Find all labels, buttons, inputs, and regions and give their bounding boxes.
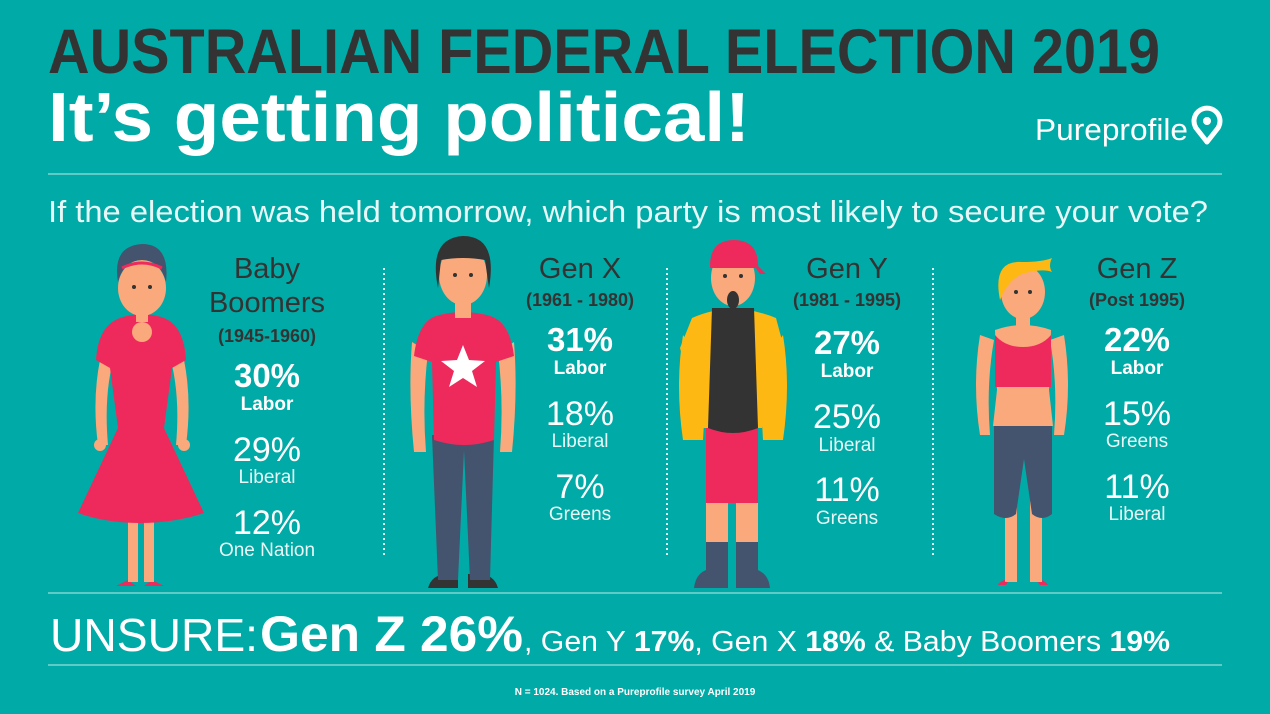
text: gen x: (1961 - 1980) [526, 290, 634, 310]
text: gen y: 25% [813, 398, 881, 436]
text: gen y: Greens [816, 508, 878, 529]
text: gen y: Liberal [818, 435, 876, 456]
unsure summary: , Gen Y 17%, Gen X 18% & Baby Boomers 19% [524, 626, 1170, 658]
text: gen x: 31% [547, 321, 613, 358]
text: gen y: (1981 - 1995) [793, 290, 901, 310]
question: If the election was held tomorrow, which party is most likely to secure your vote? [48, 194, 1208, 229]
text: baby boomers: (1945-1960) [218, 326, 316, 346]
text: gen y: 11% [814, 471, 880, 509]
text: baby boomers: 30% [234, 357, 300, 394]
footnote: N = 1024. Based on a Pureprofile survey April 2019 [515, 687, 756, 698]
figure: gen y man [679, 240, 787, 588]
text: gen z: Greens [1106, 431, 1168, 452]
text: baby boomers: Baby [234, 253, 301, 285]
dividers [384, 268, 933, 557]
text: baby boomers: One Nation [219, 540, 315, 561]
unsure summary: UNSURE: [50, 609, 258, 661]
text: baby boomers: Labor [241, 394, 294, 415]
text: gen x: Labor [554, 358, 607, 379]
text: baby boomers: 12% [233, 504, 301, 542]
text: gen z: (Post 1995) [1089, 290, 1185, 310]
text: gen z: 22% [1104, 321, 1170, 358]
text: gen x: 18% [546, 395, 614, 433]
text: gen z: 11% [1104, 468, 1170, 506]
text: baby boomers: 29% [233, 431, 301, 469]
subtitle: It’s getting political! [48, 78, 750, 156]
text: gen z: Gen Z [1097, 253, 1177, 285]
text: gen x: Liberal [551, 431, 609, 452]
text: gen z: Labor [1111, 358, 1164, 379]
text: gen y: Gen Y [806, 253, 888, 285]
text: gen z [1089, 253, 1185, 525]
text: baby boomers [209, 253, 325, 561]
text: baby boomers: Boomers [209, 287, 325, 319]
text: gen x: 7% [555, 468, 605, 506]
figure: gen z woman [976, 258, 1068, 585]
text: gen z: 15% [1103, 395, 1171, 433]
unsure summary [50, 606, 1170, 662]
text: gen x: Gen X [539, 253, 621, 285]
text: gen y: 27% [814, 324, 880, 361]
title: AUSTRALIAN FEDERAL ELECTION 2019 [48, 17, 1160, 87]
text: gen x: Greens [549, 504, 611, 525]
figure: baby boomer woman [78, 244, 204, 586]
text: gen y: Labor [821, 361, 874, 382]
text: gen z: Liberal [1108, 504, 1166, 525]
text: baby boomers: Liberal [238, 467, 296, 488]
text: gen y [793, 253, 901, 529]
text: gen x [526, 253, 634, 525]
figure: gen x man [410, 236, 516, 588]
logo: Pureprofile: Pureprofile [1035, 112, 1188, 147]
unsure summary: Gen Z 26% [260, 606, 523, 662]
